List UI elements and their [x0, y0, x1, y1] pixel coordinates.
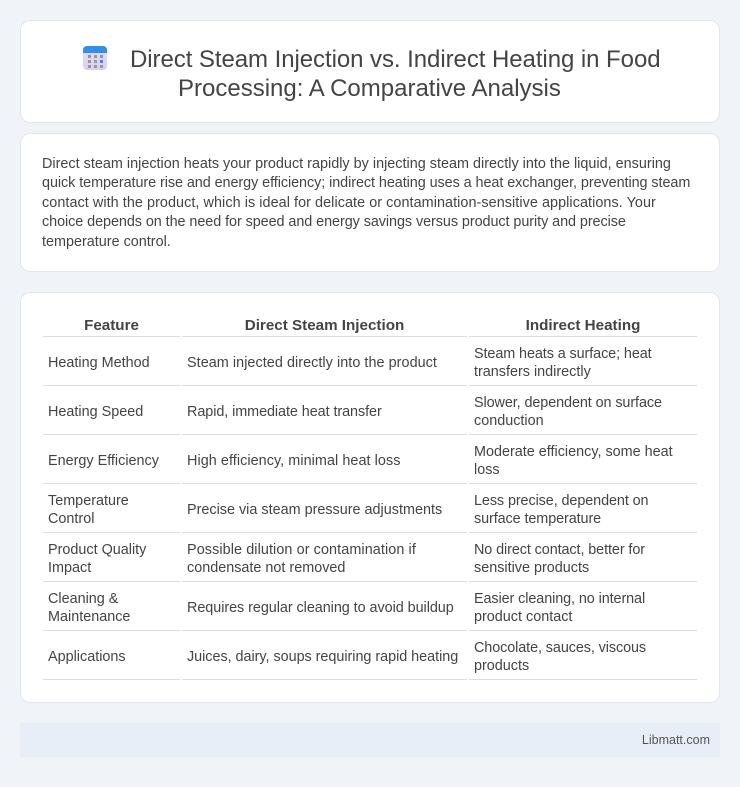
- cell: [474, 542, 645, 576]
- footer credit: Libmatt.com: [642, 733, 710, 747]
- cell: [474, 493, 648, 527]
- cell: sensitive products: [474, 560, 589, 576]
- cell: surface temperature: [474, 511, 601, 527]
- cell: transfers indirectly: [474, 364, 591, 380]
- row: cleaning and maintenance: Maintenance: [48, 609, 130, 625]
- summary line 1: Direct steam injection heats your product rapidly by injecting steam directly into the liquid, ensuring: [42, 156, 671, 172]
- panel: title: [20, 20, 720, 123]
- row: heating speed: Heating Speed: [48, 404, 143, 420]
- cell: [474, 395, 662, 429]
- heading line 2: Processing: A Comparative Analysis: [178, 75, 561, 102]
- cell: conduction: [474, 413, 544, 429]
- cell: Chocolate, sauces, viscous: [474, 640, 646, 656]
- heading line 1: Direct Steam Injection vs. Indirect Heating in Food: [130, 46, 661, 73]
- cell: Less precise, dependent on: [474, 493, 648, 509]
- cell: High efficiency, minimal heat loss: [187, 453, 400, 469]
- cell: product contact: [474, 609, 572, 625]
- cell: products: [474, 658, 529, 674]
- cell: Precise via steam pressure adjustments: [187, 502, 442, 518]
- panel: summary: [20, 133, 720, 272]
- row: temperature control: Temperature: [48, 493, 129, 509]
- row: cleaning and maintenance: [48, 591, 130, 625]
- row: cleaning and maintenance: Cleaning &: [48, 591, 118, 607]
- row: product quality impact: [48, 542, 146, 576]
- table header: Indirect Heating: [526, 317, 640, 334]
- cell: [474, 444, 673, 478]
- table header: Direct Steam Injection: [245, 317, 404, 334]
- cell: Steam injected directly into the product: [187, 355, 437, 371]
- row: product quality impact: Product Quality: [48, 542, 146, 558]
- cell: Easier cleaning, no internal: [474, 591, 645, 607]
- cell: Slower, dependent on surface: [474, 395, 662, 411]
- summary line 3: contact with the product, which is ideal for delicate or contamination-sensitive applications. Your: [42, 195, 656, 211]
- cell: Possible dilution or contamination if: [187, 542, 416, 558]
- cell: Rapid, immediate heat transfer: [187, 404, 382, 420]
- cell: No direct contact, better for: [474, 542, 645, 558]
- summary line 5: temperature control.: [42, 234, 171, 250]
- table header: Feature: [84, 317, 139, 334]
- cell: [474, 346, 652, 380]
- icon: calendar: [83, 46, 107, 70]
- cell: Steam heats a surface; heat: [474, 346, 652, 362]
- cell: Moderate efficiency, some heat: [474, 444, 673, 460]
- row: product quality impact: Impact: [48, 560, 91, 576]
- cell: loss: [474, 462, 500, 478]
- cell: Requires regular cleaning to avoid buildup: [187, 600, 454, 616]
- row: temperature control: [48, 493, 129, 527]
- panel: comparison table: [20, 292, 720, 703]
- footer: [20, 723, 720, 757]
- row: applications: Applications: [48, 649, 126, 665]
- cell: [474, 591, 645, 625]
- cell: [187, 542, 416, 576]
- cell: Juices, dairy, soups requiring rapid heating: [187, 649, 458, 665]
- row: temperature control: Control: [48, 511, 94, 527]
- cell: condensate not removed: [187, 560, 345, 576]
- row: heating method: Heating Method: [48, 355, 150, 371]
- row: energy efficiency: Energy Efficiency: [48, 453, 159, 469]
- summary line 4: choice depends on the need for speed and energy savings versus product purity and precise: [42, 214, 626, 230]
- cell: [474, 640, 646, 674]
- summary line 2: quick temperature rise and energy efficiency; indirect heating uses a heat exchanger, preventing steam: [42, 175, 690, 191]
